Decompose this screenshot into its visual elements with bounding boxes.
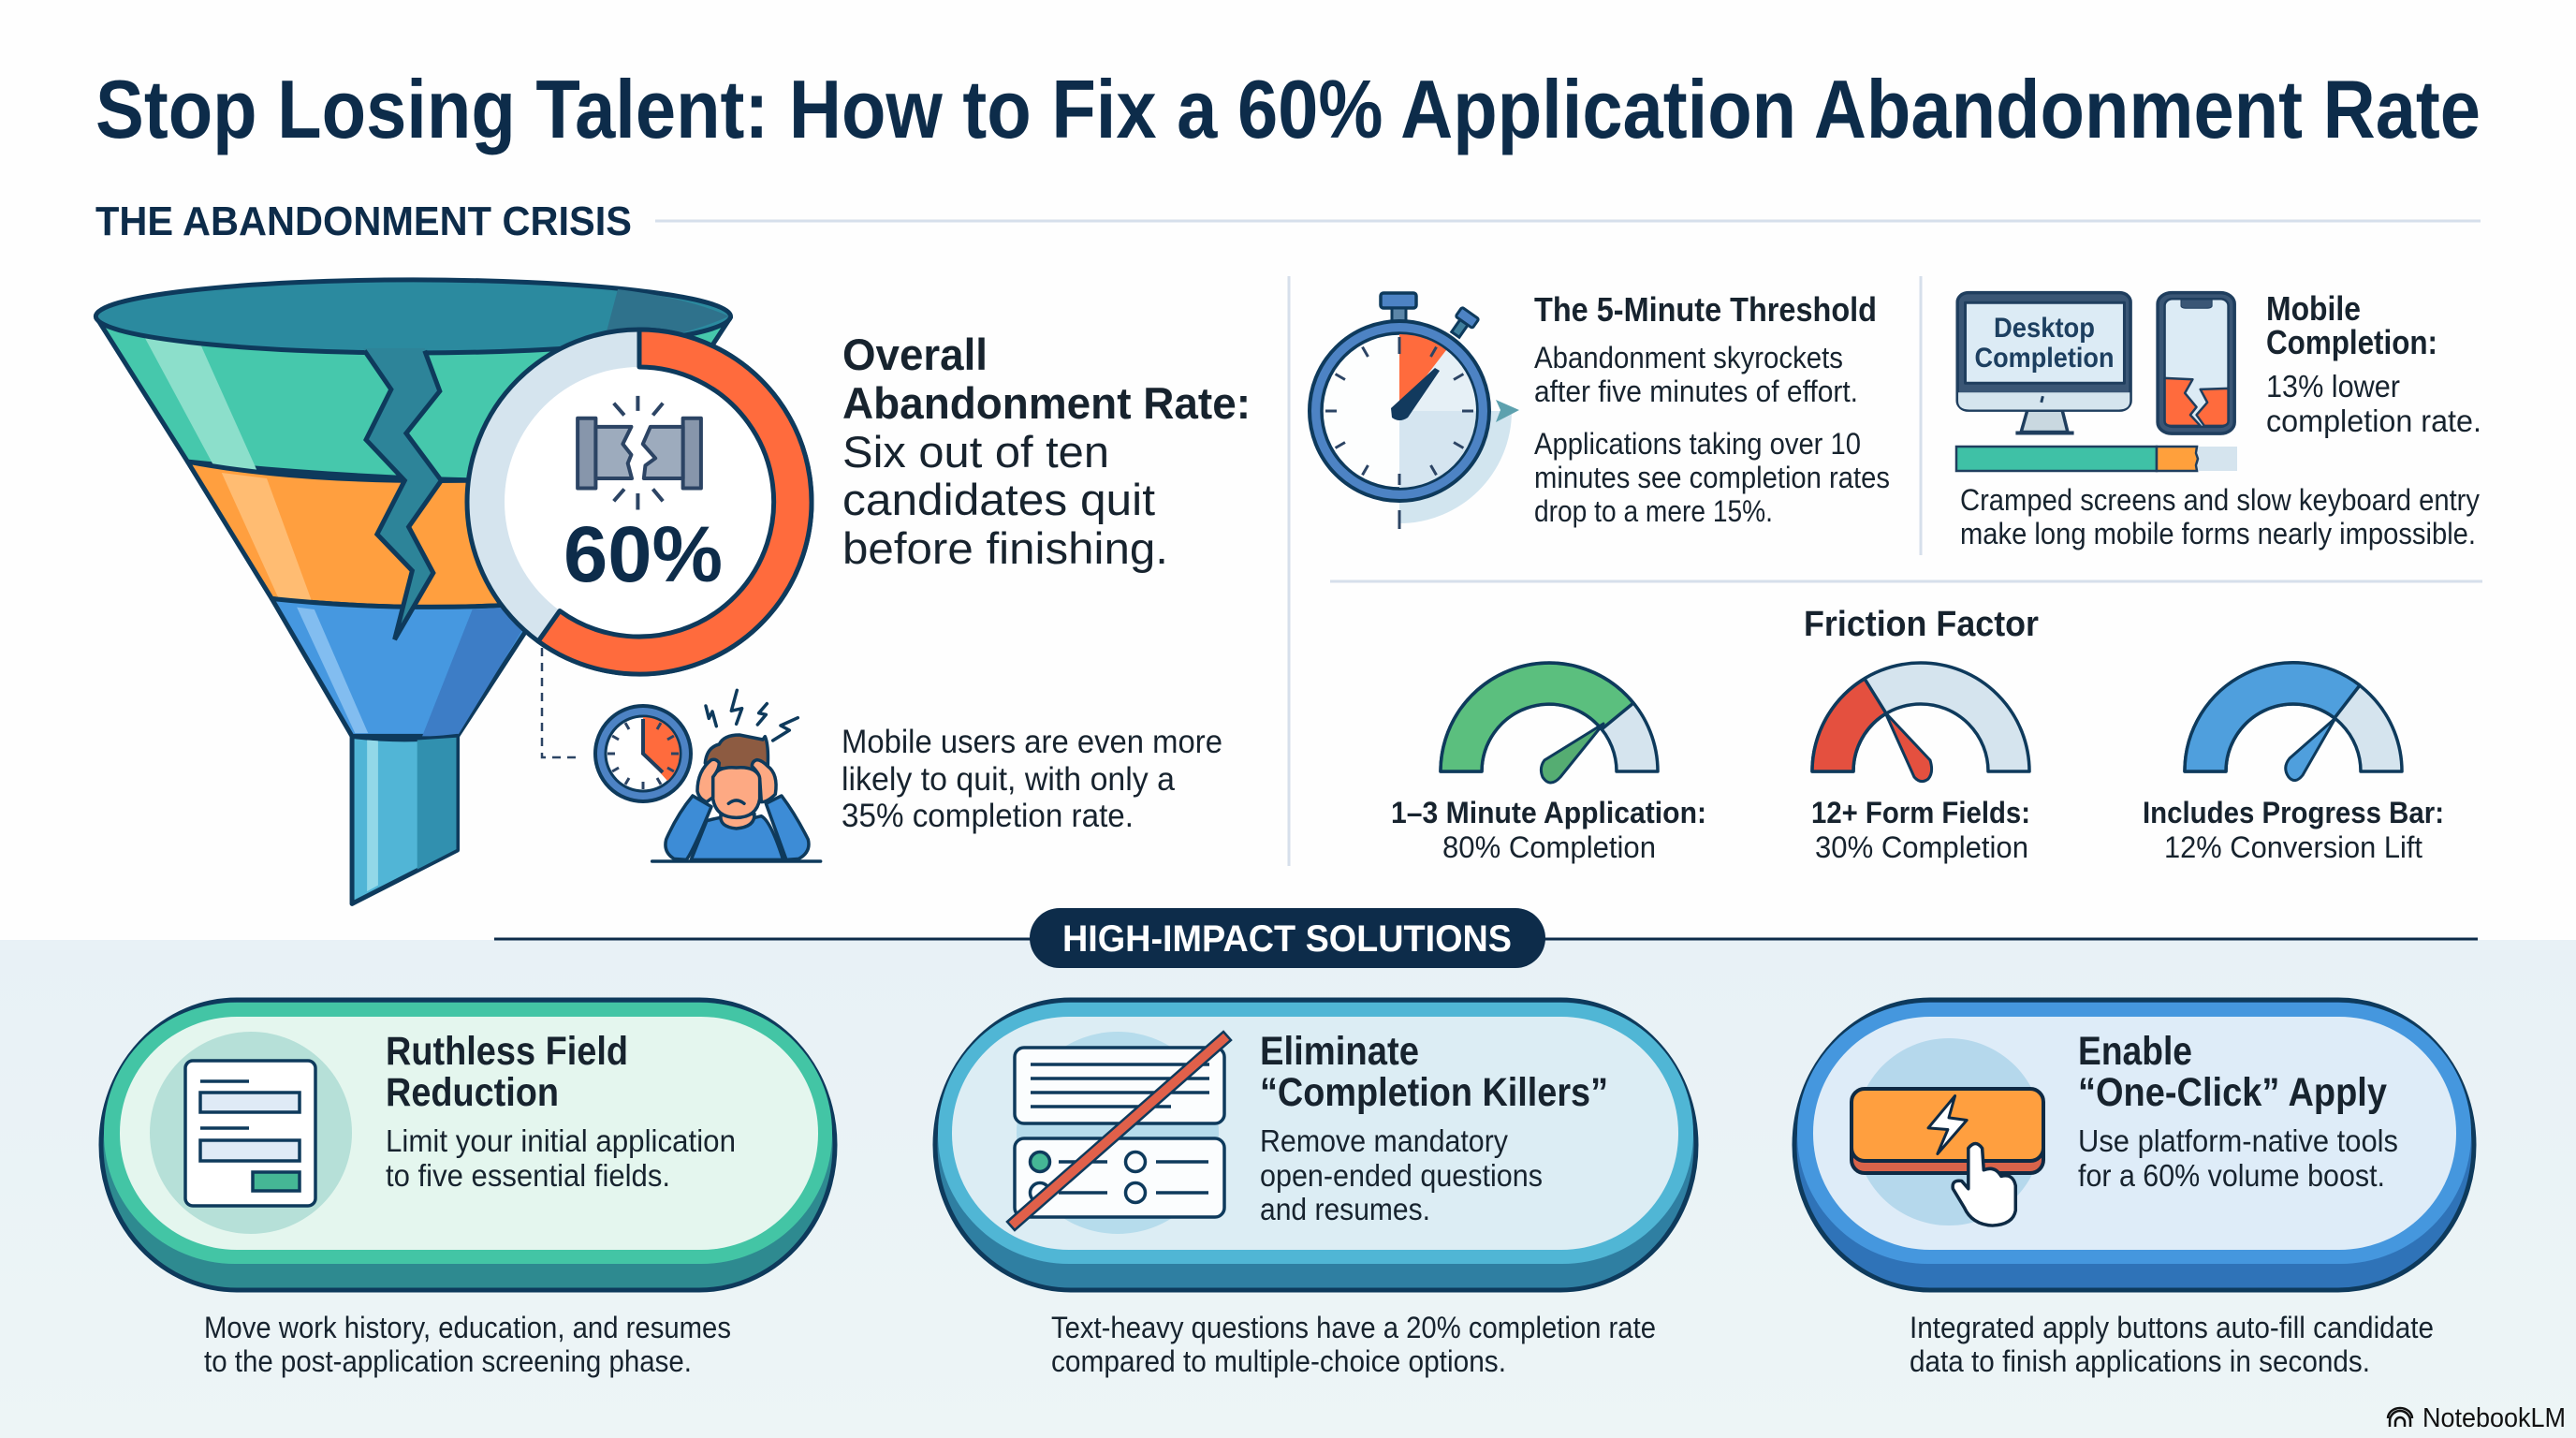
- panel: solutions background: [0, 940, 2576, 1438]
- heading: high-impact solutions: [1030, 908, 1545, 968]
- card text: Limit your initial application: [386, 1123, 736, 1158]
- panel: one-click apply: [1794, 1000, 2474, 1290]
- card text: Reduction: [386, 1070, 559, 1115]
- text block: mobile completion: 13% lower: [2266, 369, 2400, 404]
- text block: mobile completion: Mobile: [2266, 289, 2361, 328]
- icon: cracked phone: [2158, 293, 2234, 433]
- icon: frustrated person: [652, 690, 821, 861]
- icon: broken pipe: [578, 396, 701, 509]
- gauge labels: Includes Progress Bar:: [2143, 796, 2444, 829]
- heading: high-impact solutions: HIGH-IMPACT SOLUTIONS: [1062, 918, 1512, 960]
- card text: [2078, 1029, 2398, 1193]
- text block: the 5-minute threshold: [1534, 290, 1890, 528]
- text block: the 5-minute threshold: after five minutes of effort.: [1534, 374, 1858, 408]
- caption: one-click apply: [1910, 1311, 2434, 1378]
- caption: one-click apply: Integrated apply buttons auto-fill candidate: [1910, 1311, 2434, 1344]
- caption: one-click apply: data to finish applications in seconds.: [1910, 1344, 2370, 1378]
- caption: field reduction: Move work history, education, and resumes: [204, 1311, 731, 1344]
- section heading: the abandonment crisis: THE ABANDONMENT CRISIS: [95, 198, 632, 244]
- stat: 60%: 60%: [564, 510, 723, 598]
- text block: overall abandonment rate: candidates quit: [842, 475, 1155, 524]
- funnel: [95, 280, 731, 903]
- text block: the 5-minute threshold: drop to a mere 15%.: [1534, 494, 1773, 528]
- text block: the 5-minute threshold: Abandonment skyrockets: [1534, 341, 1843, 374]
- progress bar: desktop vs mobile: [1956, 447, 2237, 471]
- gauge labels: 12+ Form Fields:: [1811, 796, 2030, 829]
- text block: mobile completion: Completion:: [2266, 323, 2437, 361]
- gauge labels: 30% Completion: [1815, 830, 2028, 864]
- card text: for a 60% volume boost.: [2078, 1158, 2385, 1193]
- card text: [386, 1029, 736, 1193]
- card text: to five essential fields.: [386, 1158, 670, 1193]
- gauge: 12+ form fields: [1812, 663, 2029, 782]
- card text: “One-Click” Apply: [2078, 1070, 2387, 1115]
- text block: overall abandonment rate: before finishing.: [842, 523, 1168, 573]
- card text: open-ended questions: [1260, 1158, 1543, 1193]
- text block: overall abandonment rate: Abandonment Rate:: [842, 378, 1251, 428]
- card text: Enable: [2078, 1029, 2192, 1074]
- card text: [1260, 1029, 1608, 1226]
- caption: completion killers: compared to multiple-choice options.: [1051, 1344, 1506, 1378]
- card text: Remove mandatory: [1260, 1123, 1508, 1158]
- text block: overall abandonment rate: Overall: [842, 330, 988, 379]
- card text: Eliminate: [1260, 1029, 1419, 1074]
- icon: clock: [595, 706, 691, 801]
- icon: one-click button: [1852, 1038, 2043, 1225]
- watermark: NotebookLM: NotebookLM: [2422, 1403, 2566, 1433]
- card text: Use platform-native tools: [2078, 1123, 2398, 1158]
- text block: mobile completion: [1960, 289, 2481, 550]
- heading: friction factor: Friction Factor: [1804, 605, 2039, 644]
- text block: the 5-minute threshold: Applications taking over 10: [1534, 427, 1861, 461]
- gauge labels: 80% Completion: [1442, 830, 1656, 864]
- gauge labels: 1–3 Minute Application:: [1391, 796, 1706, 829]
- icon: crossed-out questions: [1007, 1032, 1231, 1234]
- icon: desktop monitor: Completion: [1975, 343, 2114, 374]
- text block: mobile completion: Cramped screens and slow keyboard entry: [1960, 483, 2480, 517]
- panel: eliminate completion killers: [935, 1000, 1696, 1290]
- gauge labels: [1391, 796, 2444, 864]
- text block: mobile completion: make long mobile forms nearly impossible.: [1960, 517, 2476, 550]
- text block: the 5-minute threshold: The 5-Minute Threshold: [1534, 290, 1877, 329]
- icon: desktop monitor: [1957, 293, 2130, 433]
- caption: field reduction: to the post-application screening phase.: [204, 1344, 692, 1378]
- card text: and resumes.: [1260, 1192, 1430, 1226]
- icon: desktop monitor: Desktop: [1994, 313, 2095, 344]
- text block: overall abandonment rate: Six out of ten: [842, 427, 1109, 477]
- gauge labels: 12% Conversion Lift: [2164, 830, 2422, 864]
- text block: mobile users: [842, 724, 1222, 834]
- crack: [363, 348, 441, 639]
- text block: mobile completion: completion rate.: [2266, 404, 2481, 438]
- panel: ruthless field reduction: [101, 1000, 835, 1290]
- card text: Ruthless Field: [386, 1029, 628, 1074]
- icon: short form: [150, 1032, 352, 1234]
- text block: mobile users: likely to quit, with only a: [842, 761, 1176, 798]
- gauge: includes progress bar: [2185, 663, 2402, 781]
- card text: “Completion Killers”: [1260, 1070, 1608, 1115]
- callout connector: [542, 648, 580, 757]
- text block: overall abandonment rate: [842, 330, 1251, 573]
- icon: stopwatch: [1310, 293, 1519, 529]
- text block: the 5-minute threshold: minutes see completion rates: [1534, 461, 1890, 494]
- gauge: 1-3 minute application: [1441, 663, 1658, 783]
- text block: mobile users: Mobile users are even more: [842, 724, 1222, 760]
- text block: mobile users: 35% completion rate.: [842, 798, 1134, 834]
- caption: completion killers: Text-heavy questions have a 20% completion rate: [1051, 1311, 1656, 1344]
- donut chart: 60% abandonment: [467, 330, 812, 674]
- caption: field reduction: [204, 1311, 731, 1378]
- panel: broken funnel illustration: [95, 280, 731, 903]
- caption: completion killers: [1051, 1311, 1656, 1378]
